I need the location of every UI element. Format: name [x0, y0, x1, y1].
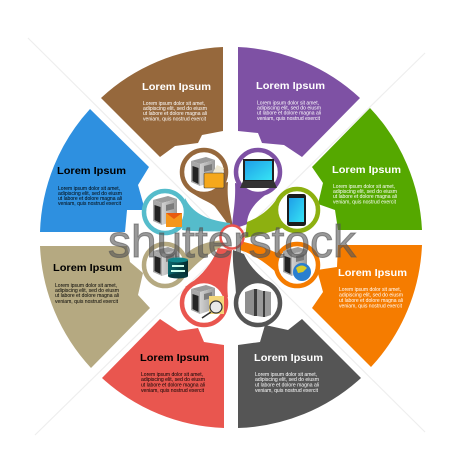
- panel: tan segment: [40, 246, 150, 368]
- panel: dark gray segment: [238, 319, 361, 428]
- connector: olive green petal: [245, 189, 318, 238]
- panel: dark gray segment: Lorem Ipsum: [254, 352, 323, 364]
- panel: tan segment: adipiscing elit, sed do eiusm: [55, 288, 119, 294]
- panel: tan segment: ut labore et dolore magna ali: [55, 293, 119, 299]
- connector: purple petal: [232, 150, 280, 232]
- connector: brown petal: [182, 150, 233, 232]
- panel: red segment: [102, 319, 224, 428]
- panel: red segment: veniam, quis nostrud exercit: [141, 388, 204, 394]
- icon: laptop: [240, 159, 277, 188]
- panel: green segment: Lorem ipsum dolor sit amet,: [333, 184, 395, 190]
- panel: orange segment: [312, 245, 422, 367]
- watermark: shutterstock: [108, 216, 357, 267]
- panel: red segment: Lorem ipsum dolor sit amet,: [141, 372, 203, 378]
- panel: green segment: Lorem Ipsum: [332, 164, 401, 176]
- connector: orange petal: [240, 241, 318, 286]
- panel: blue segment: veniam, quis nostrud exercit: [58, 201, 121, 207]
- panel: tan segment: Lorem Ipsum: [53, 262, 122, 274]
- panel: brown segment: [101, 47, 223, 157]
- panel: purple segment: adipiscing elit, sed do eiusm: [257, 106, 321, 112]
- panel: tan segment: veniam, quis nostrud exercit: [55, 299, 118, 305]
- panel: blue segment: ut labore et dolore magna ali: [58, 196, 122, 202]
- panel: orange segment: veniam, quis nostrud exercit: [339, 304, 402, 310]
- panel: orange segment: ut labore et dolore magna ali: [339, 298, 403, 304]
- icon: server with envelope: [153, 196, 182, 227]
- panel: brown segment: Lorem ipsum dolor sit amet,: [143, 101, 205, 107]
- panel: green segment: adipiscing elit, sed do eiusm: [333, 189, 397, 195]
- panel: green segment: [312, 108, 422, 230]
- icon: server with magnifier: [191, 285, 224, 318]
- connector: dark gray petal: [233, 250, 280, 325]
- panel: green segment: veniam, quis nostrud exercit: [333, 200, 396, 206]
- panel: purple segment: ut labore et dolore magna ali: [257, 111, 321, 117]
- panel: dark gray segment: veniam, quis nostrud exercit: [255, 388, 318, 394]
- panel: purple segment: [238, 47, 360, 157]
- panel: blue segment: adipiscing elit, sed do eiusm: [58, 191, 122, 197]
- panel: purple segment: Lorem ipsum dolor sit amet,: [257, 100, 319, 106]
- panel: brown segment: Lorem Ipsum: [142, 81, 211, 93]
- panel: red segment: adipiscing elit, sed do eiusm: [141, 377, 205, 383]
- panel: green segment: ut labore et dolore magna ali: [333, 194, 397, 200]
- panel: orange segment: Lorem Ipsum: [338, 267, 407, 279]
- panel: purple segment: veniam, quis nostrud exercit: [257, 116, 320, 122]
- connector: teal petal: [144, 191, 232, 233]
- panel: brown segment: adipiscing elit, sed do eiusm: [143, 106, 207, 112]
- panel: dark gray segment: ut labore et dolore magna ali: [255, 382, 319, 388]
- connector: tan petal: [144, 240, 226, 286]
- panel: orange segment: adipiscing elit, sed do eiusm: [339, 292, 403, 298]
- panel: dark gray segment: adipiscing elit, sed do eiusm: [255, 377, 319, 383]
- icon: server with database: [153, 247, 188, 278]
- panel: dark gray segment: Lorem ipsum dolor sit amet,: [255, 372, 317, 378]
- panel: blue segment: [40, 109, 149, 232]
- icon: smartphone: [287, 194, 306, 226]
- panel: red segment: Lorem Ipsum: [140, 352, 209, 364]
- panel: tan segment: Lorem ipsum dolor sit amet,: [55, 283, 117, 289]
- icon: server rack: [245, 289, 271, 317]
- icon: server with globe: [283, 247, 311, 281]
- panel: blue segment: Lorem Ipsum: [57, 165, 126, 177]
- panel: purple segment: Lorem Ipsum: [256, 80, 325, 92]
- panel: red segment: ut labore et dolore magna ali: [141, 382, 205, 388]
- center ring: [220, 226, 244, 248]
- panel: blue segment: Lorem ipsum dolor sit amet,: [58, 186, 120, 192]
- panel: brown segment: ut labore et dolore magna ali: [143, 111, 207, 117]
- panel: brown segment: veniam, quis nostrud exercit: [143, 116, 206, 122]
- connector: red petal: [182, 248, 232, 325]
- icon: server with folder: [191, 157, 224, 188]
- panel: orange segment: Lorem ipsum dolor sit amet,: [339, 287, 401, 293]
